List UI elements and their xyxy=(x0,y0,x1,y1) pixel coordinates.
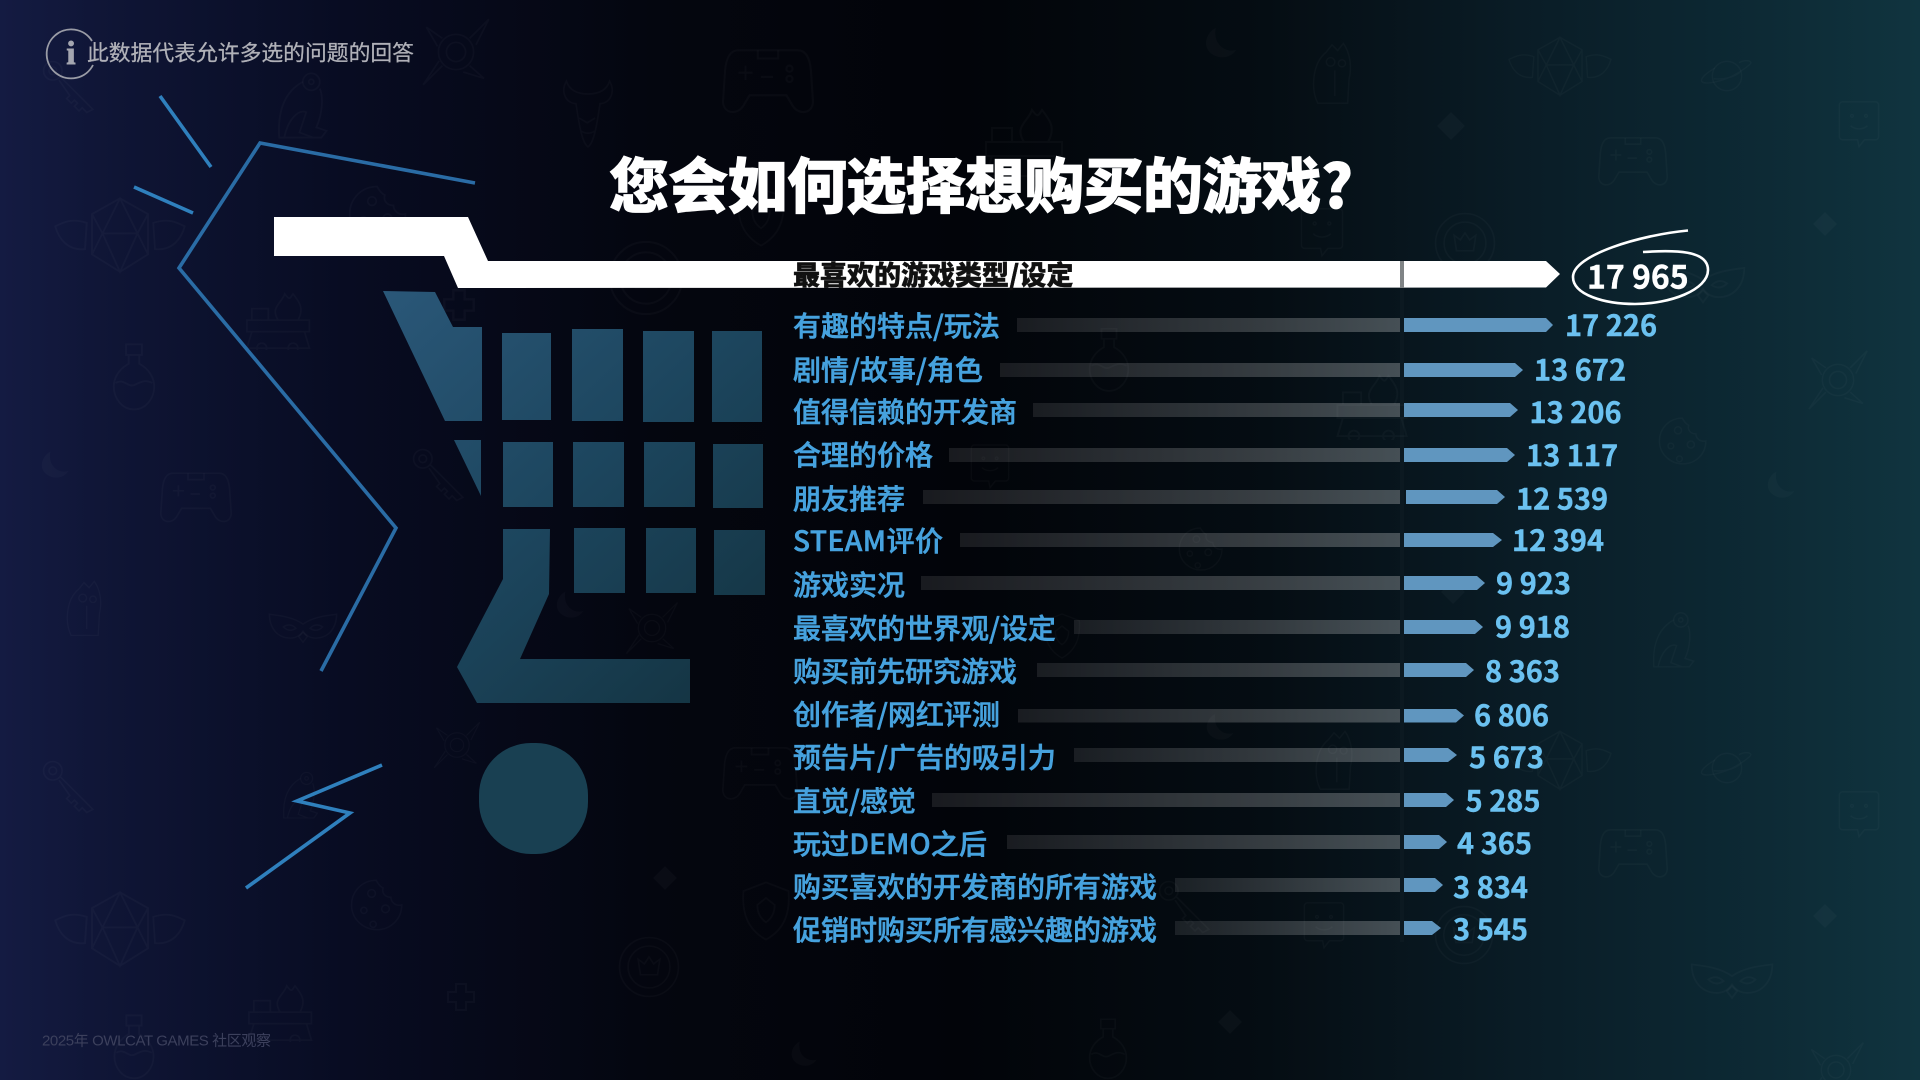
row: 朋友推荐 xyxy=(793,476,1608,518)
row: 朋友推荐: 朋友推荐 xyxy=(793,478,905,518)
divider stripe xyxy=(1400,262,1404,942)
row: 购买前先研究游戏 xyxy=(793,649,1560,691)
row: 购买喜欢的开发商的所有游戏: 3 834 xyxy=(1453,865,1528,907)
row: 值得信赖的开发商: 值得信赖的开发商 xyxy=(793,391,1017,431)
row: 值得信赖的开发商 xyxy=(793,390,1622,432)
row: 最喜欢的世界观/设定: 9 918 xyxy=(1495,604,1570,646)
icon: shopping cart basket outline xyxy=(179,143,475,671)
row: 剧情/故事/角色: 剧情/故事/角色 xyxy=(793,349,983,389)
white cart handle bar xyxy=(274,217,1560,288)
row: 直觉/感觉 xyxy=(793,778,1541,820)
row: 促销时购买所有感兴趣的游戏: 促销时购买所有感兴趣的游戏 xyxy=(793,909,1157,949)
row: 玩过DEMO之后: 玩过DEMO之后 xyxy=(793,823,987,863)
row: 有趣的特点/玩法 xyxy=(793,303,1657,345)
row: 促销时购买所有感兴趣的游戏 xyxy=(793,907,1528,949)
row: 创作者/网红评测: 创作者/网红评测 xyxy=(793,694,1000,734)
top row: favorite genre xyxy=(274,217,1708,304)
row: STEAM评价: 12 394 xyxy=(1512,518,1604,560)
decorative spark lines xyxy=(134,96,211,213)
top value with hand-drawn ellipse xyxy=(1573,230,1708,304)
row: 购买前先研究游戏: 购买前先研究游戏 xyxy=(793,650,1017,690)
row: 有趣的特点/玩法: 有趣的特点/玩法 xyxy=(793,305,1000,345)
row: 有趣的特点/玩法: 17 226 xyxy=(1565,303,1657,345)
row: 值得信赖的开发商: 13 206 xyxy=(1530,390,1622,432)
row: 玩过DEMO之后: 4 365 xyxy=(1457,821,1532,863)
footer source: 2025年 OWLCAT GAMES 社区观察 xyxy=(42,1032,271,1050)
row: 游戏实况: 游戏实况 xyxy=(793,564,905,604)
row: 预告片/广告的吸引力: 预告片/广告的吸引力 xyxy=(793,736,1056,776)
row: 购买前先研究游戏: 8 363 xyxy=(1485,649,1560,691)
row: STEAM评价 xyxy=(793,518,1604,560)
row: 预告片/广告的吸引力: 5 673 xyxy=(1469,735,1544,777)
row: 游戏实况: 9 923 xyxy=(1496,561,1571,603)
icon: lightning spark xyxy=(246,765,382,888)
title: 您会如何选择想购买的游戏? xyxy=(609,139,1353,226)
row: 朋友推荐: 12 539 xyxy=(1516,476,1608,518)
row: STEAM评价: STEAM评价 xyxy=(793,520,943,560)
row: 最喜欢的世界观/设定: 最喜欢的世界观/设定 xyxy=(793,608,1056,648)
row: 剧情/故事/角色: 13 672 xyxy=(1534,348,1626,390)
row: 购买喜欢的开发商的所有游戏 xyxy=(793,865,1528,907)
row: 直觉/感觉: 5 285 xyxy=(1466,778,1541,820)
icon: info circle xyxy=(47,29,93,78)
row: 合理的价格: 合理的价格 xyxy=(793,434,933,474)
top value with hand-drawn ellipse: 17 965 xyxy=(1587,252,1689,298)
row: 合理的价格 xyxy=(793,433,1618,475)
icon: shopping cart wheel xyxy=(479,743,588,854)
row: 玩过DEMO之后 xyxy=(793,821,1532,863)
row: 直觉/感觉: 直觉/感觉 xyxy=(793,780,916,820)
row: 游戏实况 xyxy=(793,561,1571,604)
row: 购买喜欢的开发商的所有游戏: 购买喜欢的开发商的所有游戏 xyxy=(793,866,1157,906)
row: 最喜欢的世界观/设定 xyxy=(793,604,1570,648)
note text: 此数据代表允许多选的问题的回答 xyxy=(87,36,414,68)
row: 促销时购买所有感兴趣的游戏: 3 545 xyxy=(1453,907,1528,949)
row: 创作者/网红评测 xyxy=(793,693,1549,735)
row: 创作者/网红评测: 6 806 xyxy=(1474,693,1549,735)
top row label: 最喜欢的游戏类型/设定 xyxy=(793,254,1073,293)
icon: info circle: i xyxy=(66,36,76,72)
row: 合理的价格: 13 117 xyxy=(1526,433,1618,475)
info note xyxy=(47,29,414,78)
icon: shopping cart grid xyxy=(383,291,765,703)
row: 剧情/故事/角色 xyxy=(793,348,1626,390)
row: 预告片/广告的吸引力 xyxy=(793,735,1544,777)
